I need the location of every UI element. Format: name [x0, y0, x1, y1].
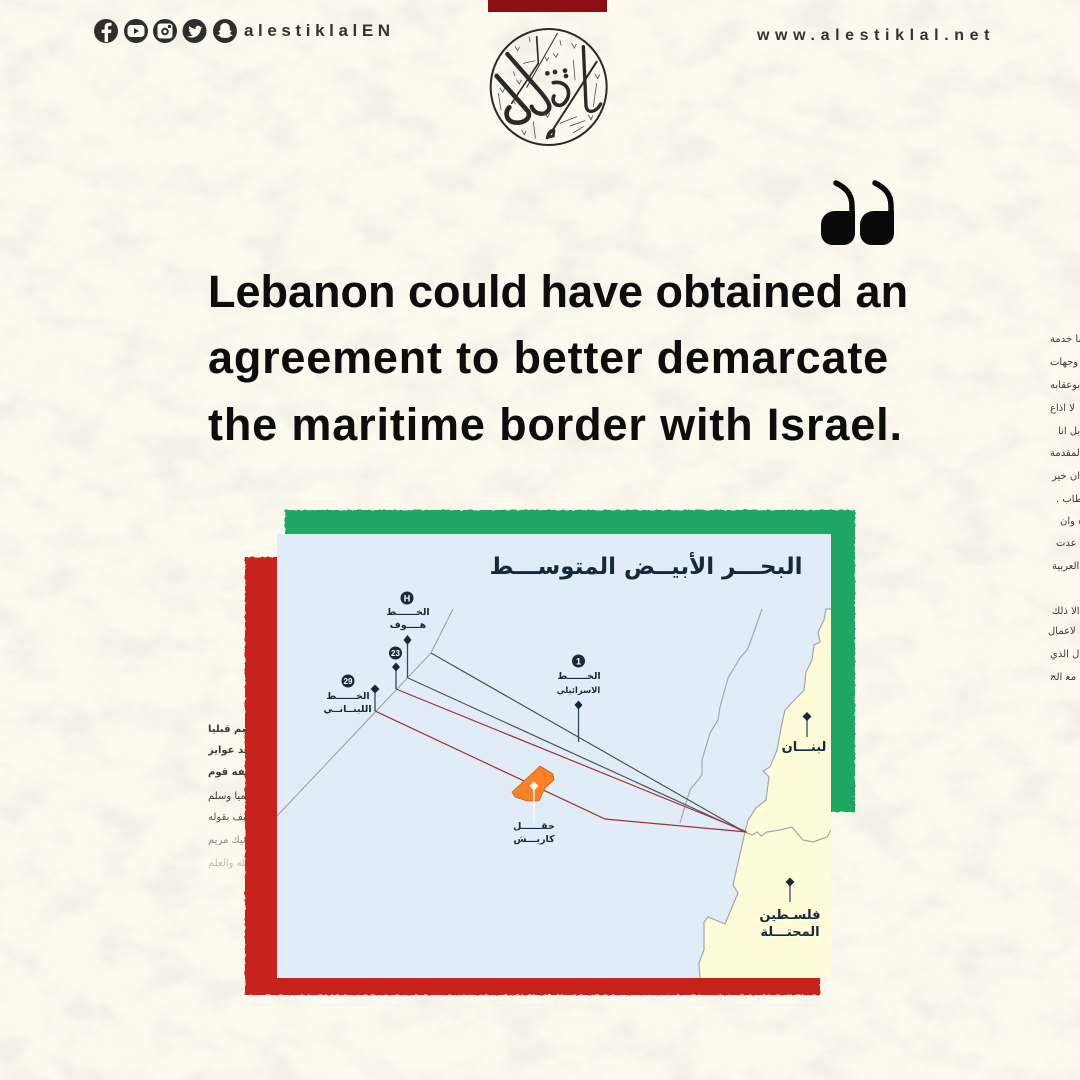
icon: facebook [94, 19, 118, 43]
Israeli line 1 [408, 678, 743, 831]
logo: circular calligraphy seal [490, 28, 608, 146]
Hof line [431, 653, 743, 831]
marker: Lebanon: لبنـــان [782, 740, 826, 755]
icon: quotation mark [821, 180, 894, 245]
social handle: alestiklalEN [244, 21, 395, 40]
marker: Israeli line 1: الاسرائيلي [557, 685, 600, 696]
marker: Lebanese line 29: 29 [344, 677, 353, 686]
red accent bar [488, 0, 607, 12]
marker: Lebanese line 29: اللبنــانــي [323, 704, 372, 715]
panel: map of maritime lines [277, 534, 831, 978]
social icons row [94, 19, 237, 43]
archival handwriting text: right edge: ل الذي [1050, 649, 1079, 660]
marker: Karish label [513, 782, 555, 845]
marker: Hof line [386, 592, 430, 678]
panel: red backing block [244, 556, 820, 996]
marker: line 23: 23 [391, 649, 400, 658]
headline: Lebanon could have obtained an [208, 266, 908, 317]
marker: Lebanese line 29: الخــــــط [326, 691, 370, 702]
icon: youtube [124, 19, 148, 43]
marker: Lebanon [782, 712, 826, 755]
map title: البحـــر الأبيــض المتوســـط [489, 551, 803, 580]
icon: snapchat [213, 19, 237, 43]
archival handwriting text: right edge: بوعقابه [1050, 380, 1080, 391]
marker: Israeli line 1 [557, 654, 601, 742]
marker: occupied Palestine: فلسـطين [759, 908, 821, 923]
archival handwriting text: right edge: العربية [1052, 561, 1079, 572]
headline: agreement to better demarcate [208, 332, 889, 383]
marker: Israeli line 1: 1 [576, 656, 581, 666]
marker: Lebanese line 29 [323, 674, 380, 715]
line 23 [396, 689, 745, 831]
archival handwriting text: left of map [208, 724, 248, 869]
marker: occupied Palestine: المحتـــلة [760, 925, 820, 940]
marker: Hof line: الخــــــط [386, 607, 430, 618]
headline: the maritime border with Israel. [208, 399, 903, 450]
archival handwriting text: right edge [1048, 334, 1080, 680]
archival handwriting text: right edge: وجهات [1050, 357, 1078, 368]
marker: Hof line: هــــوف [390, 620, 427, 631]
archival handwriting text: right edge: الا ذلك [1052, 606, 1080, 617]
archival handwriting text: right edge: ان خير [1052, 471, 1080, 482]
icon: instagram [153, 19, 177, 43]
marker: occupied Palestine [759, 878, 821, 940]
archival handwriting text: right edge: عدت [1056, 538, 1077, 549]
headline [208, 266, 908, 450]
marker: line 23 [389, 646, 402, 689]
marker: Hof line: H [404, 594, 410, 604]
offshore grey boundary curve [680, 609, 762, 823]
land: Lebanon and occupied Palestine [699, 609, 831, 978]
website url: www.alestiklal.net [757, 27, 995, 44]
land border line [745, 827, 831, 842]
Karish field [512, 766, 554, 801]
marker: Israeli line 1: الخــــــط [557, 671, 601, 682]
archival handwriting text: right edge: لا اذاع [1050, 403, 1075, 414]
icon: twitter [182, 19, 206, 43]
marker: Karish label: كاريـــش [513, 834, 555, 845]
archival handwriting text: right edge: بل انا [1058, 426, 1080, 437]
grey limit line [277, 609, 453, 816]
Lebanese line 29 [375, 711, 747, 832]
marker: Karish label: حقــــــل [513, 821, 555, 832]
panel: green backing block [284, 509, 856, 812]
archival handwriting text: right edge: لاعمال [1048, 626, 1076, 637]
